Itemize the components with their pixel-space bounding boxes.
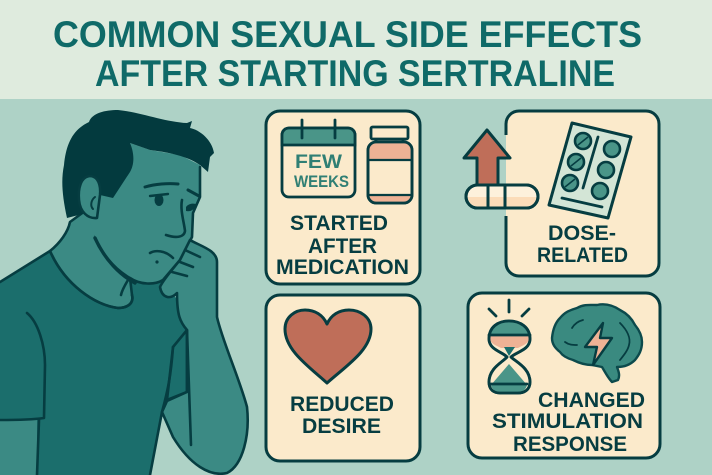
icon: heart <box>285 310 371 383</box>
icon: capsule <box>466 185 538 208</box>
panel label: RELATED <box>537 244 628 267</box>
panel: dose-related <box>464 111 659 276</box>
header band <box>0 0 712 99</box>
panel label <box>492 389 645 456</box>
panel label <box>276 212 409 279</box>
panel: reduced desire <box>266 295 420 461</box>
title: AFTER STARTING SERTRALINE <box>95 53 615 94</box>
panel label: REDUCED <box>290 393 394 416</box>
panel label: STARTED <box>290 212 388 235</box>
panel label: RESPONSE <box>513 433 627 456</box>
panel label: DESIRE <box>302 415 381 438</box>
title: COMMON SEXUAL SIDE EFFECTS <box>53 14 642 55</box>
panel label <box>537 222 628 267</box>
icon: calendar: WEEKS <box>294 172 349 191</box>
panel label: CHANGED <box>538 389 645 412</box>
icon: hourglass <box>489 300 530 393</box>
icon: blister pack <box>549 123 631 218</box>
icon: calendar <box>282 120 355 197</box>
panel label: MEDICATION <box>276 256 409 279</box>
icon: brain with lightning <box>552 304 642 382</box>
icon: calendar: FEW <box>295 152 342 173</box>
icon: medicine bottle <box>368 127 412 203</box>
panel: changed stimulation response <box>468 293 660 458</box>
panel: started after medication <box>266 111 420 284</box>
illustration: worried man <box>0 110 248 475</box>
title <box>53 14 642 94</box>
panel label <box>290 393 394 438</box>
panel label: AFTER <box>308 235 377 258</box>
panel label: STIMULATION <box>492 410 643 433</box>
panel label: DOSE- <box>548 222 616 245</box>
icon: up arrow <box>464 130 510 186</box>
